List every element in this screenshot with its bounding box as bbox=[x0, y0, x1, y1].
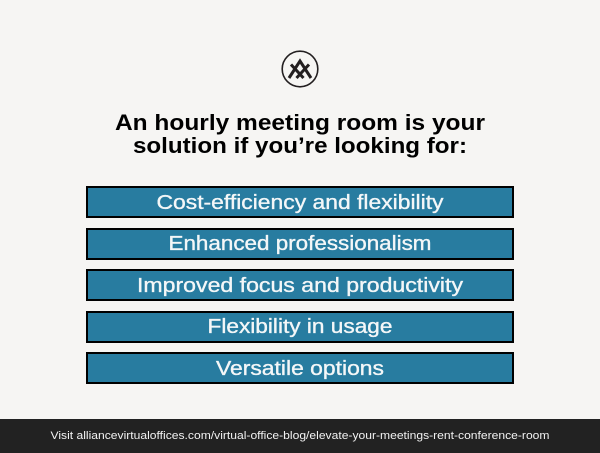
footer: Visit alliancevirtualoffices.com/virtual-office-blog/elevate-your-meetings-rent-conference-room bbox=[50, 430, 550, 442]
title: solution if you’re looking for: bbox=[133, 133, 467, 158]
bar: professionalism: Enhanced professionalism bbox=[168, 233, 432, 255]
bar: professionalism bbox=[87, 229, 513, 259]
bar: flexibility in usage bbox=[87, 312, 513, 342]
list of benefits bbox=[87, 187, 513, 383]
bar: cost-efficiency: Cost-efficiency and flexibility bbox=[156, 192, 444, 214]
bar: flexibility in usage: Flexibility in usage bbox=[208, 316, 392, 338]
bar: versatile options: Versatile options bbox=[216, 358, 384, 380]
bar: focus and productivity bbox=[87, 270, 513, 300]
bar: focus and productivity: Improved focus and productivity bbox=[137, 275, 463, 297]
footer bbox=[0, 419, 600, 453]
bar: cost-efficiency bbox=[87, 187, 513, 217]
bar: versatile options bbox=[87, 353, 513, 383]
title bbox=[115, 110, 485, 158]
title: An hourly meeting room is your bbox=[115, 110, 485, 135]
icon: logo bbox=[282, 51, 318, 87]
